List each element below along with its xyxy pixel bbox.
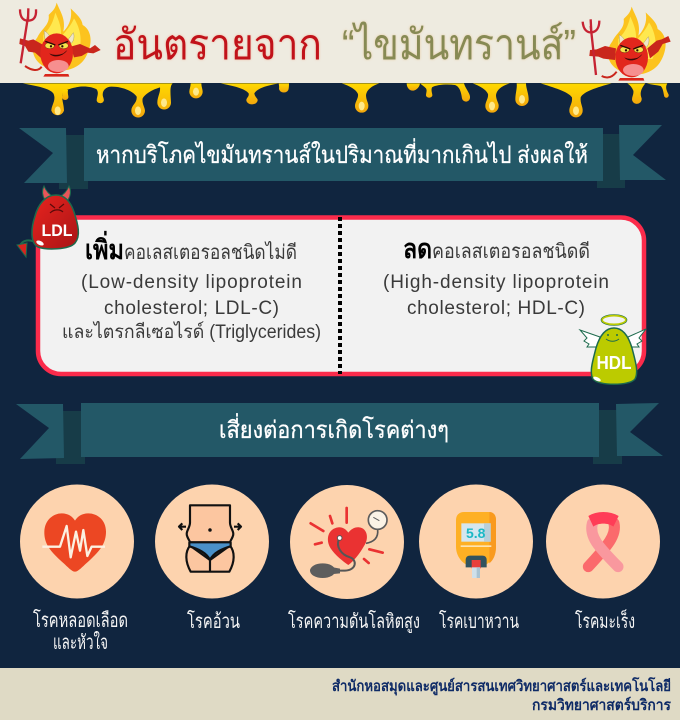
disease: cancer: [546, 484, 660, 633]
icon: awareness ribbon: [546, 484, 660, 598]
ribbon banner: disease risk heading: [16, 403, 663, 464]
ribbon banner: consequence heading: หากบริโภคไขมันทรานส์ในปริมาณที่มากเกินไป ส่งผลให้: [96, 138, 588, 169]
icon: glucose meter: [419, 484, 533, 598]
text block: decreases HDL: cholesterol; HDL-C): [407, 298, 585, 319]
label: โรคความดันโลหิตสูง: [288, 610, 420, 634]
label: โรคมะเร็ง: [575, 608, 635, 633]
disease: heart and blood vessel: [20, 484, 134, 654]
disease: diabetes: [419, 484, 533, 633]
title: อันตรายจาก: [113, 21, 322, 68]
label: โรคอ้วน: [187, 610, 240, 633]
text block: increases LDL: และไตรกลีเซอไรด์ (Triglycerides): [62, 321, 321, 343]
label: โรคหลอดเลือด: [33, 609, 128, 632]
icon: waist: [155, 484, 269, 598]
footer credit text: กรมวิทยาศาสตร์บริการ: [532, 696, 672, 714]
title: [113, 21, 576, 68]
icon: LDL devil character: [17, 186, 78, 257]
text block: increases LDL: [62, 230, 321, 343]
icon: heart with pulse: [20, 484, 134, 598]
footer band: [0, 668, 680, 720]
text block: decreases HDL: [383, 234, 609, 319]
icon: HDL angel character: HDL: [596, 353, 632, 373]
title: “ไขมันทรานส์”: [342, 21, 576, 68]
disease: obesity: [155, 484, 269, 633]
icon: heart with blood pressure gauge: [290, 485, 404, 599]
label: โรคเบาหวาน: [439, 610, 519, 633]
text block: decreases HDL: คอเลสเตอรอลชนิดดี: [432, 241, 590, 263]
text block: increases LDL: คอเลสเตอรอลชนิดไม่ดี: [124, 241, 297, 264]
text block: increases LDL: เพิ่ม: [85, 230, 124, 265]
text block: decreases HDL: (High-density lipoprotein: [383, 272, 609, 293]
text block: increases LDL: (Low-density lipoprotein: [81, 272, 302, 293]
text block: decreases HDL: ลด: [403, 234, 432, 264]
icon: LDL devil character: LDL: [42, 221, 72, 240]
devil mascot right: [583, 7, 671, 81]
icon: HDL angel character: [580, 314, 646, 384]
icon: glucose meter: 5.8: [466, 525, 486, 541]
label: และหัวใจ: [53, 631, 108, 654]
label: [33, 609, 128, 654]
title: อันตรายจาก: [113, 21, 322, 68]
panel: effects on cholesterol: [38, 217, 644, 374]
ribbon banner: consequence heading: [19, 125, 666, 189]
footer credit text: [332, 676, 672, 714]
text block: increases LDL: cholesterol; LDL-C): [104, 298, 279, 319]
disease: hypertension: [288, 485, 420, 634]
header band: [0, 0, 680, 83]
devil mascot left: [19, 3, 101, 77]
ribbon banner: disease risk heading: เสี่ยงต่อการเกิดโรคต่างๆ: [219, 413, 449, 444]
title: “ไขมันทรานส์”: [342, 21, 576, 68]
melting fat drips: [23, 83, 669, 117]
